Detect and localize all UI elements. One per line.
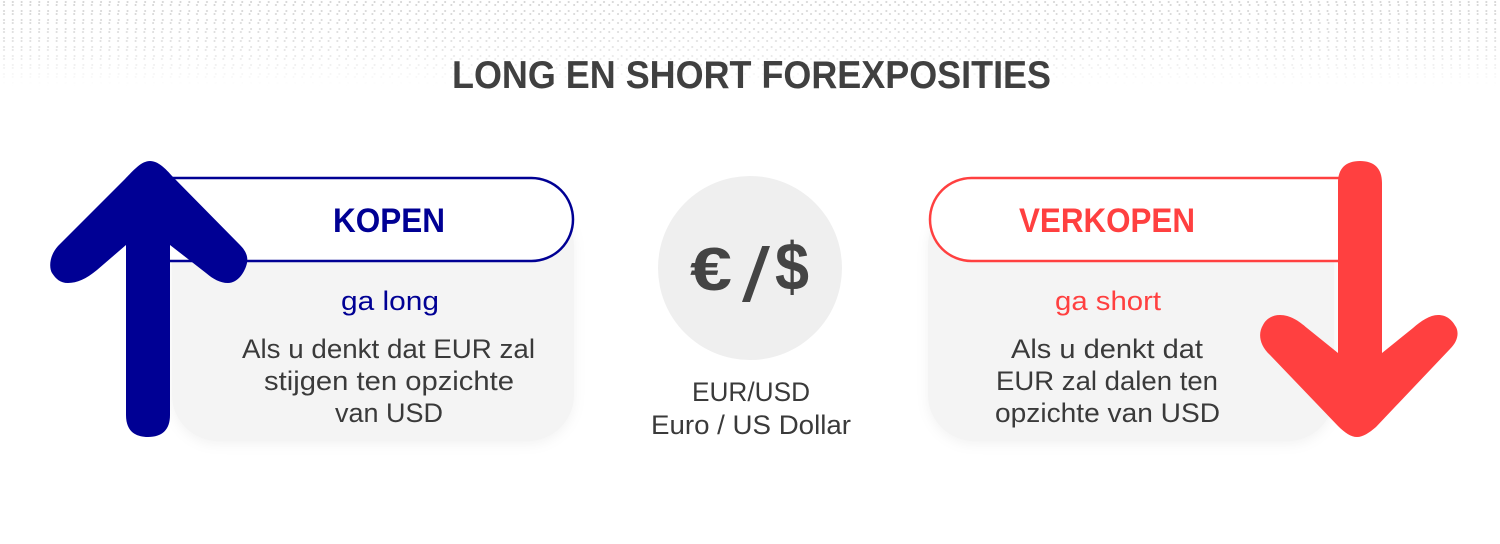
currency label: Euro / US Dollar xyxy=(651,410,851,440)
description: kopen: stijgen ten opzichte xyxy=(264,366,514,396)
description: verkopen xyxy=(995,334,1220,428)
pill label: kopen: KOPEN xyxy=(333,202,445,240)
currency label xyxy=(651,377,851,440)
description: kopen: Als u denkt dat EUR zal xyxy=(242,334,535,364)
pill: verkopen xyxy=(930,178,1350,261)
arrow: down xyxy=(1260,161,1458,437)
subheading: ga short: ga short xyxy=(1055,286,1162,316)
title: LONG EN SHORT FOREXPOSITIES xyxy=(452,54,1051,97)
description: verkopen: opzichte van USD xyxy=(995,398,1220,428)
subheading: ga long: ga long xyxy=(341,286,439,316)
pill label: verkopen: VERKOPEN xyxy=(1019,202,1195,240)
card background: verkopen xyxy=(928,200,1334,441)
icon: currency circle xyxy=(658,176,842,360)
icon: euro sign: € xyxy=(690,236,732,303)
icon: slash: / xyxy=(742,233,771,318)
icon: dollar sign: $ xyxy=(775,229,809,305)
currency label: EUR/USD xyxy=(692,377,810,407)
panel: currency pair xyxy=(651,176,851,440)
arrow: up xyxy=(50,161,247,437)
panel: kopen xyxy=(50,161,574,441)
pill: kopen xyxy=(150,178,573,261)
card background: kopen xyxy=(172,200,574,441)
description: verkopen: EUR zal dalen ten xyxy=(996,366,1218,396)
description: kopen xyxy=(242,334,535,428)
panel: verkopen xyxy=(928,161,1458,441)
description: verkopen: Als u denkt dat xyxy=(1011,334,1204,364)
description: kopen: van USD xyxy=(335,398,443,428)
